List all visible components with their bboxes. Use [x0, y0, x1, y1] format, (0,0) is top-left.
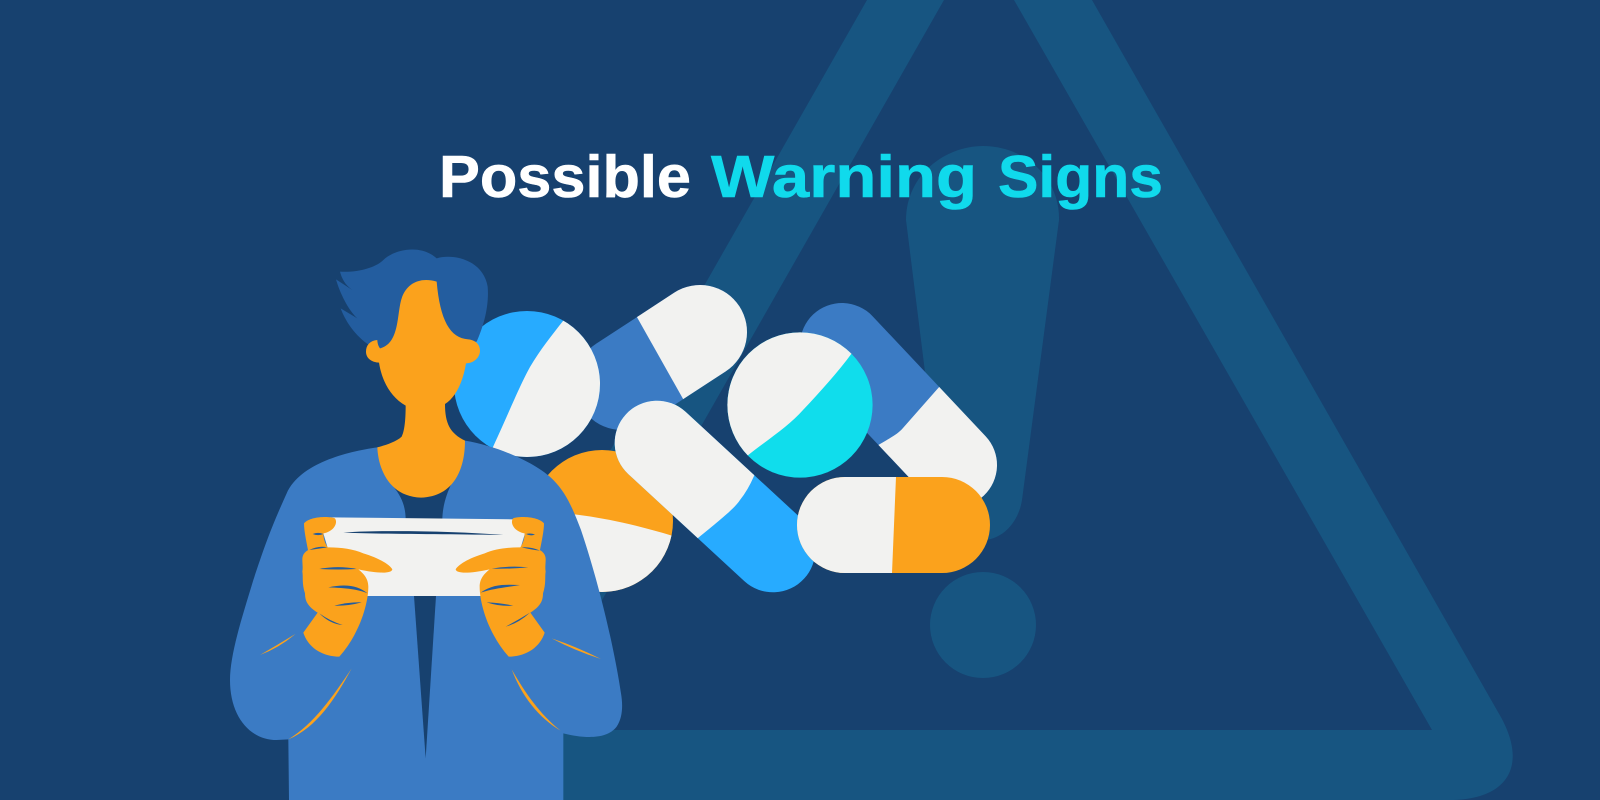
title word: Possible: Possible [439, 144, 691, 210]
tablet: orange and white [548, 450, 673, 592]
phone [323, 517, 525, 596]
finger creases [309, 533, 540, 627]
tablet: light blue and white [454, 311, 600, 457]
left hand [302, 517, 392, 657]
face and neck [366, 280, 480, 498]
exclamation mark dot [930, 572, 1036, 678]
tablet: white and cyan [727, 332, 873, 478]
title word: Signs: Signs [998, 144, 1163, 210]
shirt collar opening [393, 483, 452, 520]
person holding a phone [230, 250, 622, 800]
capsule: white and light blue, long diagonal [657, 443, 773, 550]
capsule: blue and white, right [842, 345, 955, 465]
right hand [456, 517, 546, 657]
title [439, 144, 1163, 210]
hair [336, 250, 488, 352]
exclamation mark body [906, 146, 1059, 540]
sleeve folds [260, 634, 601, 739]
jacket [230, 441, 622, 800]
warning triangle with exclamation mark [411, 0, 1513, 800]
phone screen shadow [343, 531, 503, 535]
triangle outline [411, 0, 1513, 800]
capsule: blue and white, top centre [622, 332, 700, 383]
capsule: white and orange, horizontal [797, 477, 990, 573]
shirt below phone [414, 596, 436, 758]
title word: Warning: Warning [711, 144, 977, 210]
